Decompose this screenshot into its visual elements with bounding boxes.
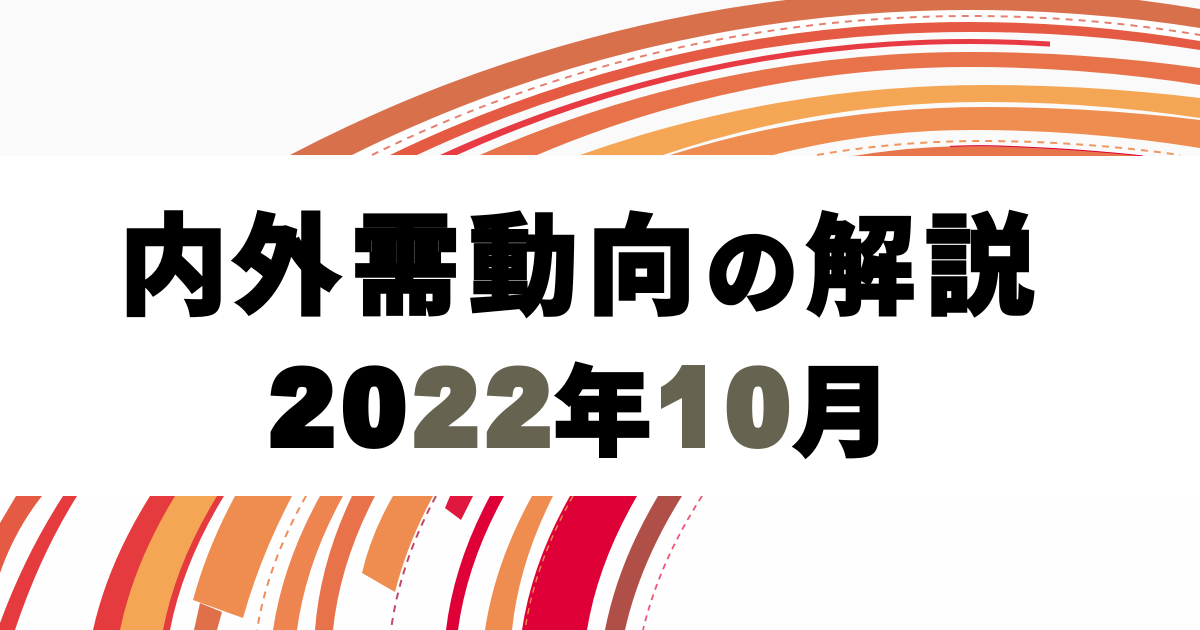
month digit one: 1 [659, 352, 722, 468]
year digits black: 2 [272, 348, 333, 465]
year digits grey [416, 348, 549, 465]
year kanji: 年 [554, 359, 651, 468]
month kanji: 月 [793, 358, 891, 468]
main title: 解 [806, 207, 915, 329]
top arc decoration [290, 0, 1200, 156]
year digits grey: 2 [488, 348, 549, 465]
main title: 内 [119, 207, 228, 329]
main title: 向 [587, 207, 696, 329]
month digit zero: 0 [728, 348, 788, 465]
bottom arc decoration [0, 496, 703, 630]
year digits black: 0 [344, 348, 405, 465]
main title: 外 [232, 207, 341, 329]
main title [119, 207, 1034, 329]
date subtitle [270, 361, 878, 460]
year digits black [272, 348, 405, 465]
year digits grey: 2 [416, 348, 477, 465]
main title: 動 [469, 207, 578, 329]
main title: 説 [925, 207, 1034, 329]
main title: 需 [351, 207, 460, 329]
main title: の [706, 223, 798, 325]
